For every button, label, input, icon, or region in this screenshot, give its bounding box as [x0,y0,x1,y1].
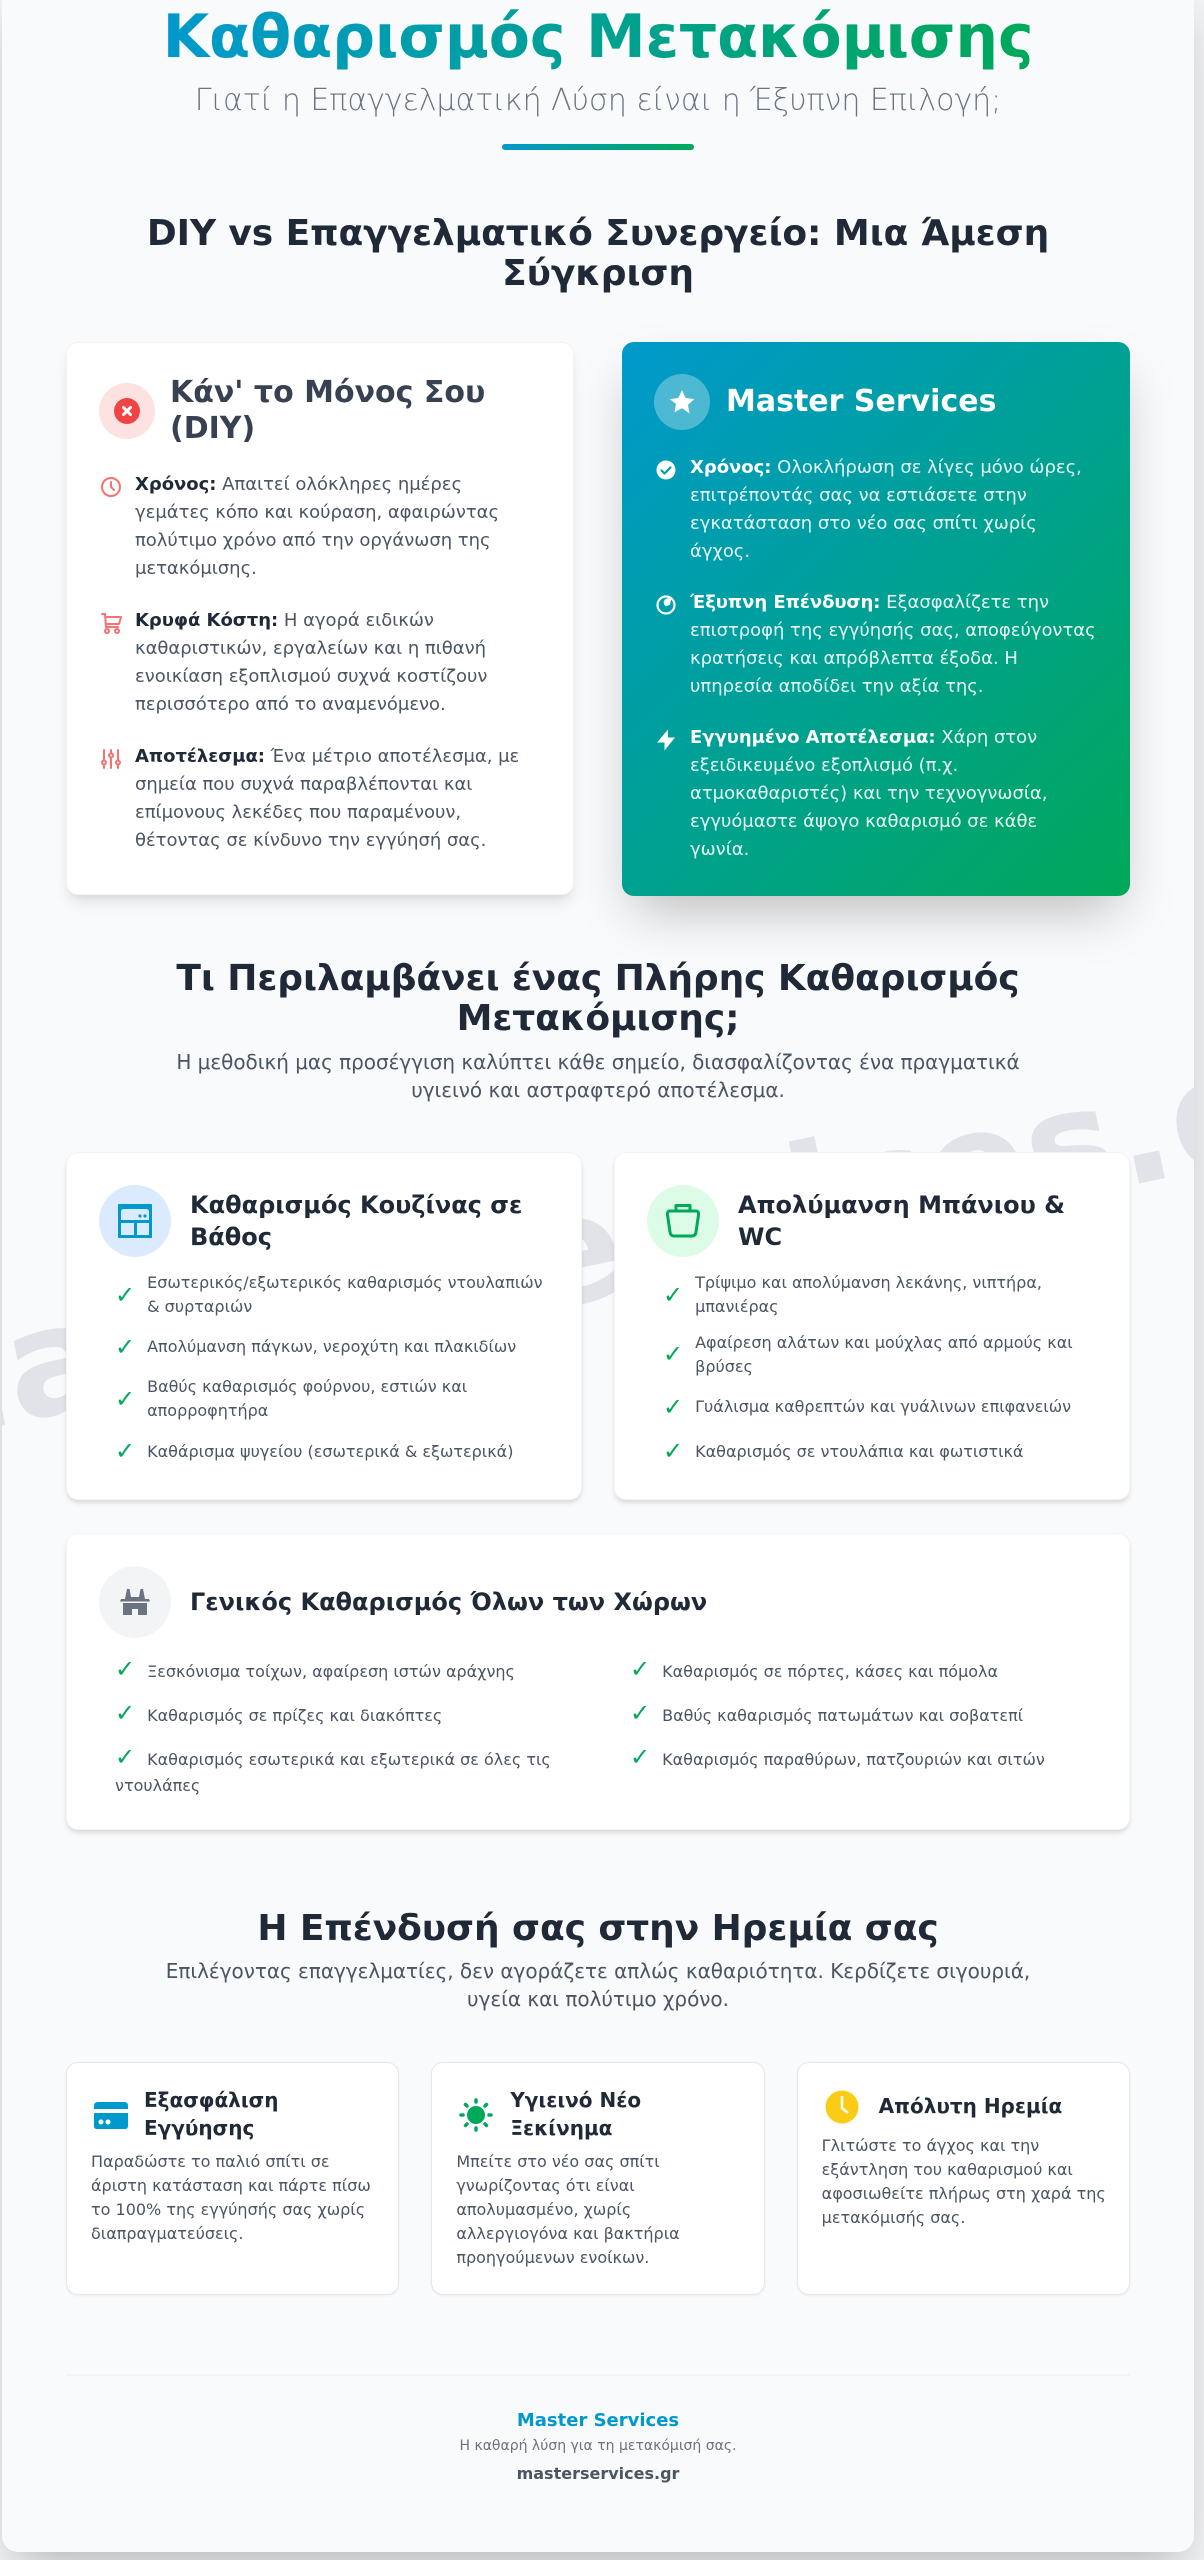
bathroom checklist: ✓ [663,1392,683,1420]
general cleaning checklist: ✓ Καθαρισμός σε πόρτες, κάσες και πόμολα [630,1655,998,1683]
general cleaning checklist: ✓ Ξεσκόνισμα τοίχων, αφαίρεση ιστών αράχνης [115,1655,515,1683]
kitchen heading: Καθαρισμός Κουζίνας σε [190,1191,522,1219]
gradient accent bar [502,144,694,150]
healthy start title: Ξεκίνημα [510,2116,612,2140]
heading: comparison: Σύγκριση [502,253,694,294]
bathroom heading [738,1191,1065,1251]
bathroom checklist [663,1273,1073,1465]
icon: bathroom [647,1185,719,1257]
healthy start text: απολυμασμένο, χωρίς [456,2200,631,2219]
deposit benefit text: Παραδώστε το παλιό σπίτι σε [91,2152,330,2171]
kitchen checklist: ✓ [115,1385,135,1413]
footer brand: Master Services [517,2410,679,2431]
panel: bathroom [614,1152,1130,1500]
intro text: investment: Επιλέγοντας επαγγελματίες, δεν αγοράζετε απλώς καθαριότητα. Κερδίζετε σιγουριά, [166,1959,1030,1983]
kitchen checklist: ✓ [115,1437,135,1465]
bathroom checklist: Γυάλισμα καθρεπτών και γυάλινων επιφανειών [695,1397,1071,1416]
DIY panel heading: (DIY) [170,411,255,446]
footer website: masterservices.gr [517,2464,679,2483]
intro text: what is included: Η μεθοδική μας προσέγγιση καλύπτει κάθε σημείο, διασφαλίζοντας ένα πραγματικά [176,1050,1020,1074]
healthy start title: Υγιεινό Νέο [510,2088,641,2112]
panel: deposit benefit [66,2062,399,2295]
deposit benefit text: διαπραγματεύσεις. [91,2224,244,2243]
bathroom checklist: ✓ [663,1281,683,1309]
peace of mind header [826,2090,1062,2124]
kitchen checklist: ✓ [115,1281,135,1309]
panel: healthy start benefit [431,2062,765,2295]
heading: comparison [147,213,1049,294]
intro text: investment: υγεία και πολύτιμο χρόνο. [467,1987,729,2011]
deposit benefit header [94,2088,278,2140]
bathroom checklist: Τρίψιμο και απολύμανση λεκάνης, νιπτήρα, [695,1273,1042,1292]
footer tagline: Η καθαρή λύση για τη μετακόμισή σας. [459,2438,737,2454]
DIY points list: σημεία που συχνά παραβλέπονται και [135,774,472,795]
Master Services points list: γωνία. [690,839,749,860]
healthy start header [459,2088,641,2140]
kitchen checklist: Απολύμανση πάγκων, νεροχύτη και πλακιδίων [147,1337,516,1356]
DIY points list: θέτοντας σε κίνδυνο την εγγύησή σας. [135,830,486,851]
intro text: what is included: υγιεινό και αστραφτερό αποτέλεσμα. [411,1078,785,1102]
panel: general cleaning [66,1533,1130,1830]
heading: comparison: DIY vs Επαγγελματικό Συνεργείο: Μια Άμεση [147,213,1049,254]
panel: kitchen [66,1152,582,1500]
heading: what is included: Τι Περιλαμβάνει ένας Πλήρης Καθαρισμός [176,958,1020,999]
Master Services points list: κρατήσεις και απρόβλεπτα έξοδα. Η [690,648,1018,669]
deposit benefit title: Εξασφάλιση [144,2088,278,2112]
Master Services points list: υπηρεσία αποδίδει την αξία της. [690,676,983,697]
bathroom heading: Απολύμανση Μπάνιου & [738,1191,1065,1219]
Master Services points list: εγκατάσταση στο νέο σας σπίτι χωρίς [690,513,1037,534]
bathroom header [647,1185,1065,1257]
icon: red cross [99,383,155,439]
panel: DIY [66,342,574,895]
DIY panel heading [170,375,485,446]
peace of mind text [822,2136,1106,2227]
DIY points list: καθαριστικών, εργαλείων και η πιθανή [135,638,486,659]
peace of mind title: Απόλυτη Ηρεμία [879,2094,1062,2118]
healthy start text: Μπείτε στο νέο σας σπίτι [456,2152,660,2171]
kitchen checklist: απορροφητήρα [147,1401,268,1420]
kitchen checklist: Βαθύς καθαρισμός φούρνου, εστιών και [147,1377,467,1396]
general cleaning checklist: ✓ Βαθύς καθαρισμός πατωμάτων και σοβατεπί [630,1699,1023,1727]
kitchen checklist: & συρταριών [147,1297,252,1316]
DIY points list: μετακόμισης. [135,558,257,579]
DIY points list: ενοικίαση εξοπλισμού συχνά κοστίζουν [135,666,487,687]
peace of mind text: Γλιτώστε το άγχος και την [822,2136,1039,2155]
icon: general cleaning [99,1566,171,1638]
healthy start text: γνωρίζοντας ότι είναι [456,2176,635,2195]
DIY points list: πολύτιμο χρόνο από την οργάνωση της [135,530,490,551]
general cleaning checklist: ✓ Καθαρισμός σε πρίζες και διακόπτες [115,1699,442,1727]
icon: yellow clock [826,2090,858,2124]
Master Services points list: επιστροφή της εγγύησής σας, αποφεύγοντας [690,620,1096,641]
kitchen checklist: Εσωτερικός/εξωτερικός καθαρισμός ντουλαπιών [147,1273,543,1292]
DIY panel header [99,375,485,446]
DIY points list: περισσότερο από το αναμενόμενο. [135,694,446,715]
Master Services panel header [654,374,996,430]
bathroom checklist: ✓ [663,1340,683,1368]
bathroom checklist: Αφαίρεση αλάτων και μούχλας από αρμούς και [695,1332,1073,1352]
kitchen checklist: Καθάρισμα ψυγείου (εσωτερικά & εξωτερικά) [147,1442,513,1461]
general cleaning header [99,1566,707,1638]
peace of mind text: εξάντληση του καθαρισμού και [822,2160,1073,2179]
DIY points list: Κρυφά Κόστη: Η αγορά ειδικών [135,610,434,631]
Master Services points list [656,457,1096,860]
kitchen heading: Βάθος [190,1223,272,1251]
Master Services heading: Master Services [726,384,996,419]
Master Services points list: Εγγυημένο Αποτέλεσμα: Χάρη στον [690,727,1037,748]
DIY points list [101,474,519,851]
Master Services points list: Χρόνος: Ολοκλήρωση σε λίγες μόνο ώρες, [690,457,1082,478]
Master Services points list: επιτρέποντάς σας να εστιάσετε στην [690,485,1027,506]
deposit benefit title: Εγγύησης [144,2116,254,2140]
Master Services points list: ατμοκαθαριστές) και την τεχνογνωσία, [690,783,1047,804]
Master Services points list: άγχος. [690,541,750,562]
deposit benefit text [91,2152,371,2243]
general cleaning checklist [115,1655,1045,1795]
subtitle: Γιατί η Επαγγελματική Λύση είναι η Έξυπνη Επιλογή; [195,83,1001,118]
heading: what is included: Μετακόμισης; [457,998,739,1039]
Master Services points list: Έξυπνη Επένδυση: Εξασφαλίζετε την [690,592,1049,613]
general cleaning checklist: ντουλάπες [115,1776,200,1795]
icon: kitchen [99,1185,171,1257]
Master Services points list: εγγυόμαστε άψογο καθαρισμό σε κάθε [690,811,1037,832]
DIY points list: γεμάτες κόπο και κούραση, αφαιρώντας [135,502,499,523]
heading: investment: Η Επένδυσή σας στην Ηρεμία σας [257,1908,939,1949]
DIY points list: Αποτέλεσμα: Ένα μέτριο αποτέλεσμα, με [135,746,519,767]
panel: peace of mind benefit [797,2062,1130,2295]
peace of mind text: αφοσιωθείτε πλήρως στη χαρά της [822,2184,1106,2203]
kitchen heading [190,1191,522,1251]
panel: Master Services [622,342,1130,896]
deposit benefit title [144,2088,278,2140]
general cleaning heading: Γενικός Καθαρισμός Όλων των Χώρων [190,1588,707,1616]
intro text: investment [166,1959,1030,2011]
deposit benefit text: άριστη κατάσταση και πάρτε πίσω [91,2176,371,2195]
general cleaning checklist: ✓ Καθαρισμός παραθύρων, πατζουριών και σιτών [630,1743,1045,1771]
icon: payment card [94,2102,128,2129]
title: Καθαρισμός Μετακόμισης [163,2,1033,72]
healthy start title [510,2088,641,2140]
bathroom checklist: ✓ [663,1437,683,1465]
healthy start text [456,2152,680,2267]
peace of mind text: μετακόμισής σας. [822,2208,965,2227]
icon: star [654,374,710,430]
bathroom checklist: μπανιέρας [695,1297,779,1316]
kitchen checklist: ✓ [115,1333,135,1361]
intro text: what is included [176,1050,1020,1102]
DIY points list: Χρόνος: Απαιτεί ολόκληρες ημέρες [135,474,462,495]
bathroom heading: WC [738,1223,782,1251]
icon: sun [459,2098,493,2132]
DIY panel heading: Κάν' το Μόνος Σου [170,375,485,410]
kitchen header [99,1185,522,1257]
healthy start text: αλλεργιογόνα και βακτήρια [456,2224,680,2243]
bathroom checklist: βρύσες [695,1356,753,1376]
Master Services points list: εξειδικευμένο εξοπλισμό (π.χ. [690,755,958,776]
kitchen checklist [115,1273,543,1465]
heading: what is included [176,958,1020,1039]
bathroom checklist: Καθαρισμός σε ντουλάπια και φωτιστικά [695,1442,1023,1461]
deposit benefit text: το 100% της εγγύησής σας χωρίς [91,2200,365,2219]
DIY points list: επίμονους λεκέδες που παραμένουν, [135,802,461,823]
healthy start text: προηγούμενων ενοίκων. [456,2248,649,2267]
general cleaning checklist: ✓ Καθαρισμός εσωτερικά και εξωτερικά σε όλες τις [115,1743,551,1771]
